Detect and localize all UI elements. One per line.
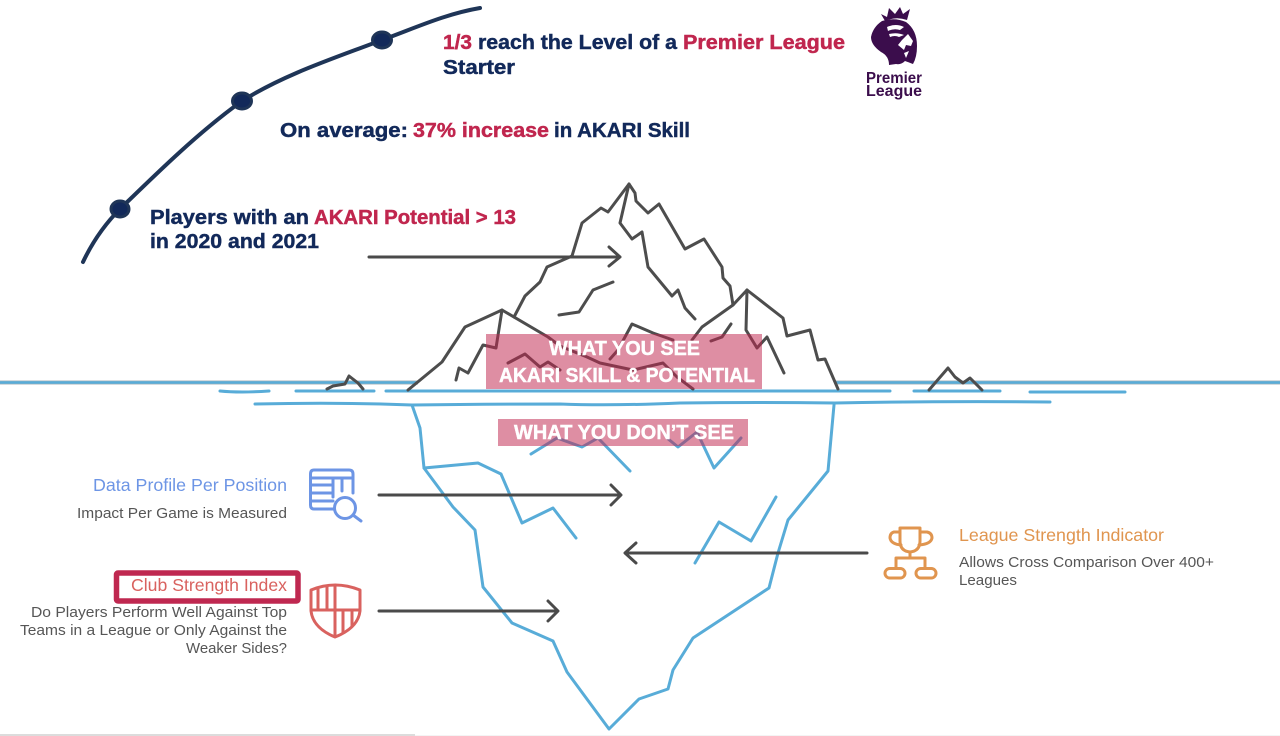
banner: what you see: WHAT YOU SEE xyxy=(549,338,700,360)
text: club strength description: Do Players Perform Well Against Top xyxy=(31,604,287,621)
text: club strength description: Teams in a League or Only Against the xyxy=(20,622,287,639)
logo: Premier League: League xyxy=(866,83,922,100)
iceberg above water xyxy=(408,184,838,390)
logo: Premier League xyxy=(866,7,922,100)
text: one third reach Premier League starter: Premier League xyxy=(683,32,845,54)
text: players with AKARI potential: AKARI Potential > 13 xyxy=(314,207,516,229)
text: average increase in AKARI skill: On average: xyxy=(280,120,408,142)
arrow: club strength xyxy=(379,601,558,621)
small iceberg right xyxy=(929,368,982,390)
iceberg below water xyxy=(412,405,834,729)
banner: what you see xyxy=(486,334,762,389)
text: data profile per position: Impact Per Game is Measured xyxy=(77,505,287,522)
text: average increase in AKARI skill: 37% increase xyxy=(413,120,549,142)
icon: data table with magnifier xyxy=(310,470,361,521)
small iceberg left xyxy=(327,376,363,389)
text: data profile per position: Data Profile Per Position xyxy=(93,475,287,495)
logo: Premier League: Premier xyxy=(866,70,922,87)
icon: trophy hierarchy xyxy=(885,528,936,578)
text: average increase in AKARI skill: in AKARI Skill xyxy=(554,120,690,142)
arrow: league strength xyxy=(625,543,867,563)
text: one third reach Premier League starter xyxy=(443,32,845,79)
text: league strength indicator: Leagues xyxy=(959,572,1017,589)
text: players with AKARI potential xyxy=(150,207,516,253)
icon: shield xyxy=(311,584,360,637)
arrow: data profile xyxy=(379,485,621,505)
text: club strength description xyxy=(20,604,287,657)
text: one third reach Premier League starter: Starter xyxy=(443,57,515,79)
text: league strength indicator: Allows Cross Comparison Over 400+ xyxy=(959,554,1214,571)
text: data profile per position xyxy=(77,475,287,522)
text: average increase in AKARI skill xyxy=(280,120,690,142)
text: league strength indicator: League Strength Indicator xyxy=(959,525,1164,545)
text: league strength indicator xyxy=(959,525,1214,589)
text: players with AKARI potential: in 2020 and 2021 xyxy=(150,231,319,253)
banner: what you see: AKARI SKILL & POTENTIAL xyxy=(499,365,755,387)
highlight box: club strength index xyxy=(116,573,298,601)
text: club strength description: Weaker Sides? xyxy=(186,640,287,657)
text: players with AKARI potential: Players with an xyxy=(150,207,309,229)
growth curve with milestones xyxy=(83,8,480,262)
arrow: to visible iceberg xyxy=(369,247,620,266)
banner: what you don't see: WHAT YOU DON’T SEE xyxy=(514,422,734,444)
highlight box: club strength index: Club Strength Index xyxy=(131,575,287,595)
waterline xyxy=(0,382,1280,405)
text: one third reach Premier League starter: 1/3 xyxy=(443,32,472,54)
text: one third reach Premier League starter: reach the Level of a xyxy=(478,32,678,54)
